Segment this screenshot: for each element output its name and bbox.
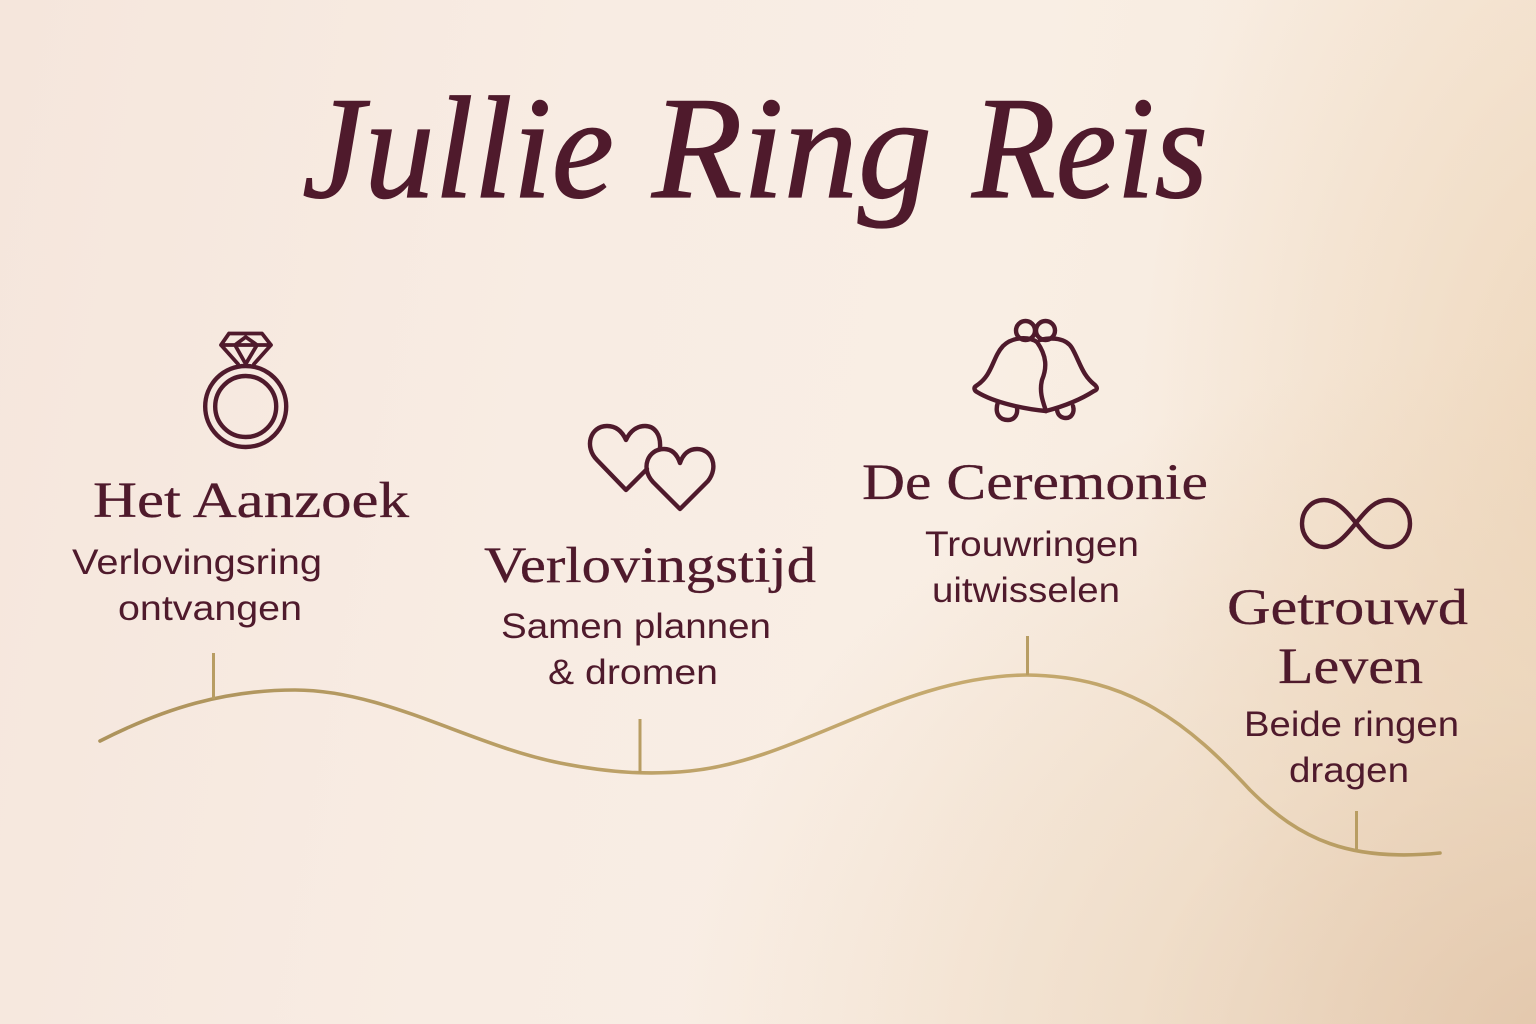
description: & dromen	[548, 653, 718, 692]
heading: Leven	[1278, 639, 1423, 695]
step 2: verlovingstijd	[484, 426, 816, 692]
description: Trouwringen	[925, 525, 1139, 564]
title: Jullie	[302, 67, 614, 229]
icon: two hearts	[590, 426, 713, 509]
description: ontvangen	[118, 589, 302, 628]
step 3: de ceremonie	[862, 321, 1208, 610]
step 4: getrouwd leven	[1227, 500, 1468, 790]
heading: Het Aanzoek	[93, 473, 410, 529]
timeline curve with markers	[100, 636, 1440, 855]
step 1: het aanzoek	[72, 334, 410, 628]
title: Reis	[971, 67, 1208, 229]
icon: wedding bells	[974, 321, 1097, 420]
title: Ring	[651, 67, 932, 229]
icon: engagement ring	[205, 334, 286, 447]
heading: De Ceremonie	[862, 455, 1208, 511]
description: Verlovingsring	[72, 543, 322, 582]
heading: Verlovingstijd	[484, 538, 816, 594]
heading: Getrouwd	[1227, 580, 1468, 636]
description: Samen plannen	[501, 607, 771, 646]
icon: infinity	[1302, 500, 1410, 547]
description: dragen	[1289, 751, 1409, 790]
description: uitwisselen	[932, 571, 1120, 610]
description: Beide ringen	[1244, 705, 1459, 744]
